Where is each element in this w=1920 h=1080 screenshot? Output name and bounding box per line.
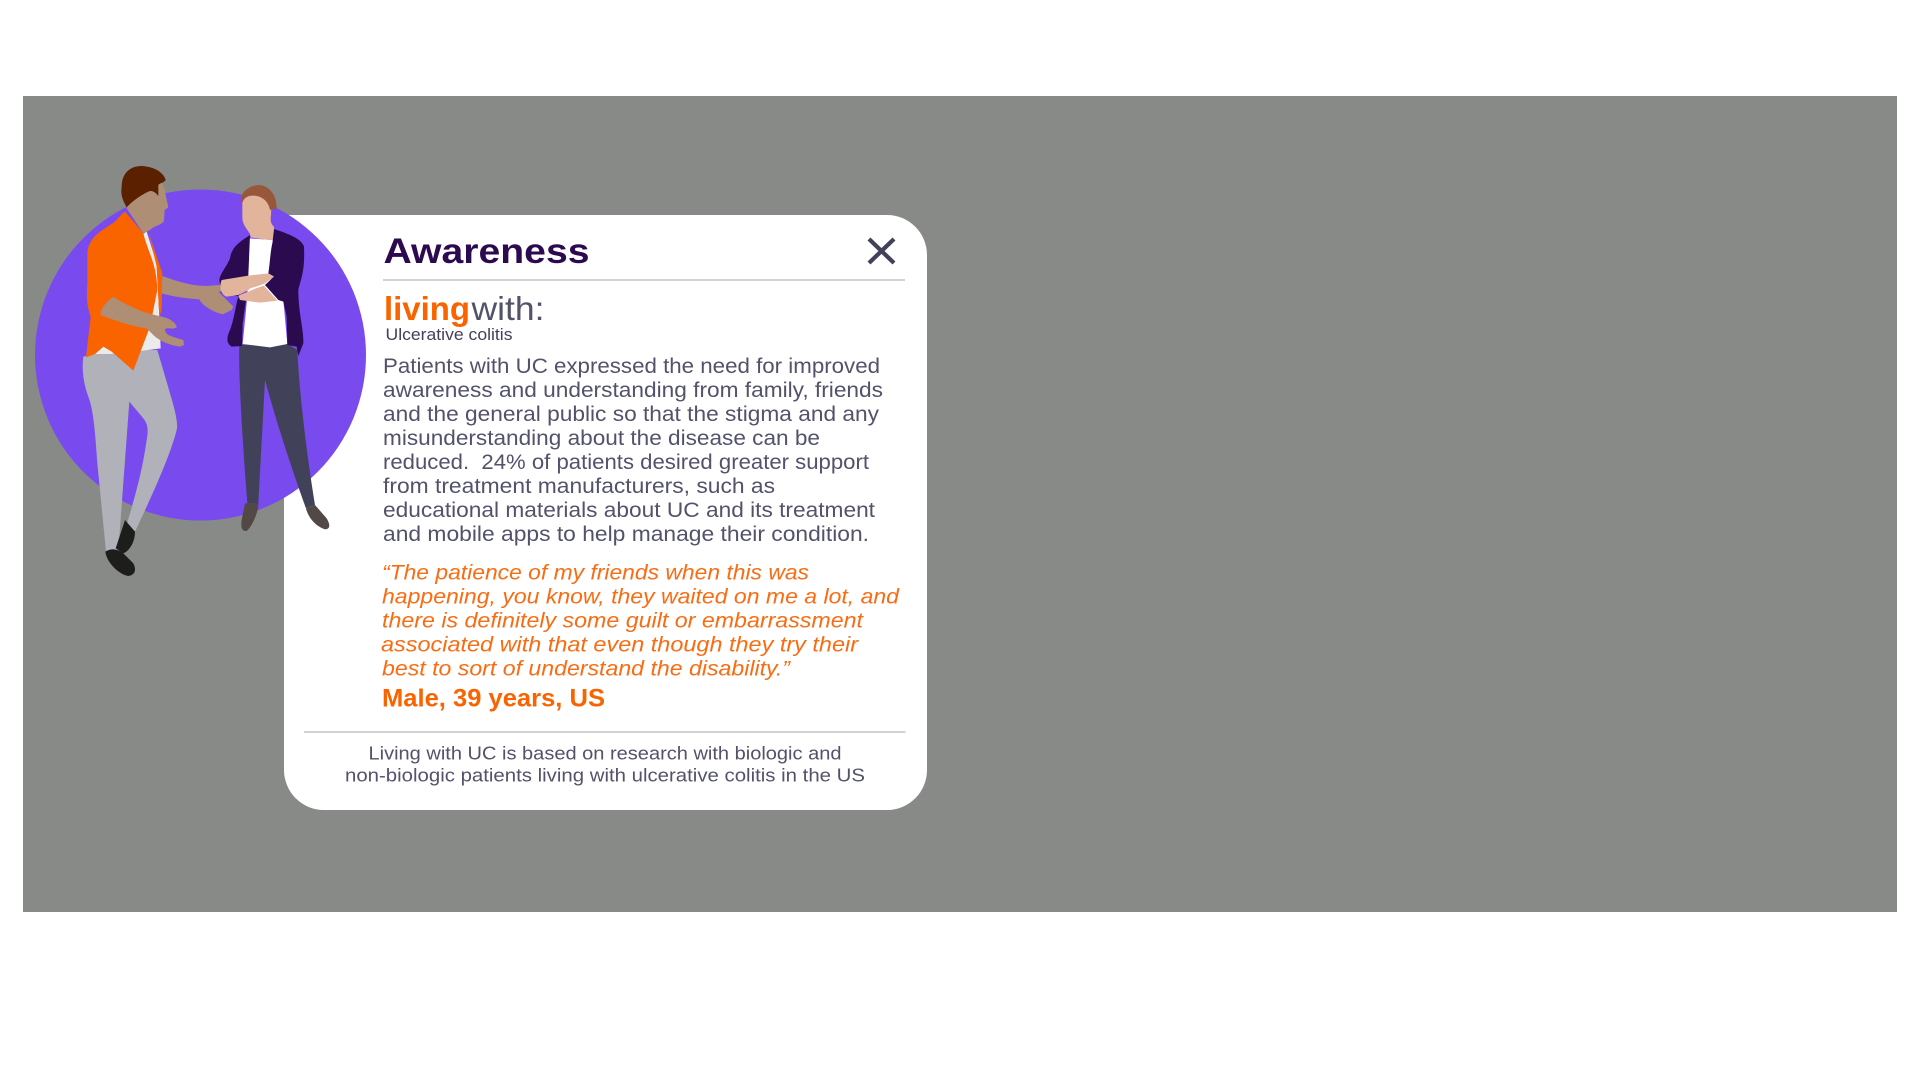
footnote: non-biologic patients living with ulcerative colitis in the US: [345, 764, 865, 786]
patient quote: “The patience of my friends when this was: [382, 562, 810, 584]
patient quote: [381, 562, 900, 680]
body text: and mobile apps to help manage their condition.: [383, 523, 869, 546]
subtitle: Ulcerative colitis: [386, 326, 512, 344]
title: Awareness: [384, 232, 590, 271]
body text: and the general public so that the stigma and any: [383, 403, 880, 426]
patient quote: there is definitely some guilt or embarrassment: [382, 610, 864, 632]
brand: living with: living: [384, 290, 470, 327]
body text: [383, 355, 883, 546]
panel: awareness card: [284, 215, 927, 810]
body text: reduced. 24% of patients desired greater support: [383, 451, 869, 474]
footnote: Living with UC is based on research with biologic and: [368, 742, 842, 764]
brand: living with: [384, 290, 544, 327]
figure: man in orange shirt: [83, 166, 233, 576]
body text: Patients with UC expressed the need for improved: [383, 355, 880, 378]
body text: educational materials about UC and its treatment: [383, 499, 875, 522]
purple circle: [35, 190, 366, 520]
body text: awareness and understanding from family, friends: [383, 379, 883, 402]
body text: misunderstanding about the disease can be: [383, 427, 820, 450]
body text: from treatment manufacturers, such as: [383, 475, 775, 498]
illustration: two people talking: [83, 166, 329, 576]
grey backdrop: [23, 96, 1897, 912]
brand: living with: with:: [470, 290, 544, 327]
footnote: [345, 742, 865, 786]
patient quote: associated with that even though they try their: [381, 634, 859, 656]
patient quote: happening, you know, they waited on me a lot, and: [382, 586, 900, 608]
card background: [284, 215, 927, 810]
icon: close: [869, 239, 894, 263]
patient quote: best to sort of understand the disability.”: [382, 658, 791, 680]
quote attribution: Male, 39 years, US: [382, 684, 605, 712]
figure: woman in purple jacket: [219, 185, 329, 531]
